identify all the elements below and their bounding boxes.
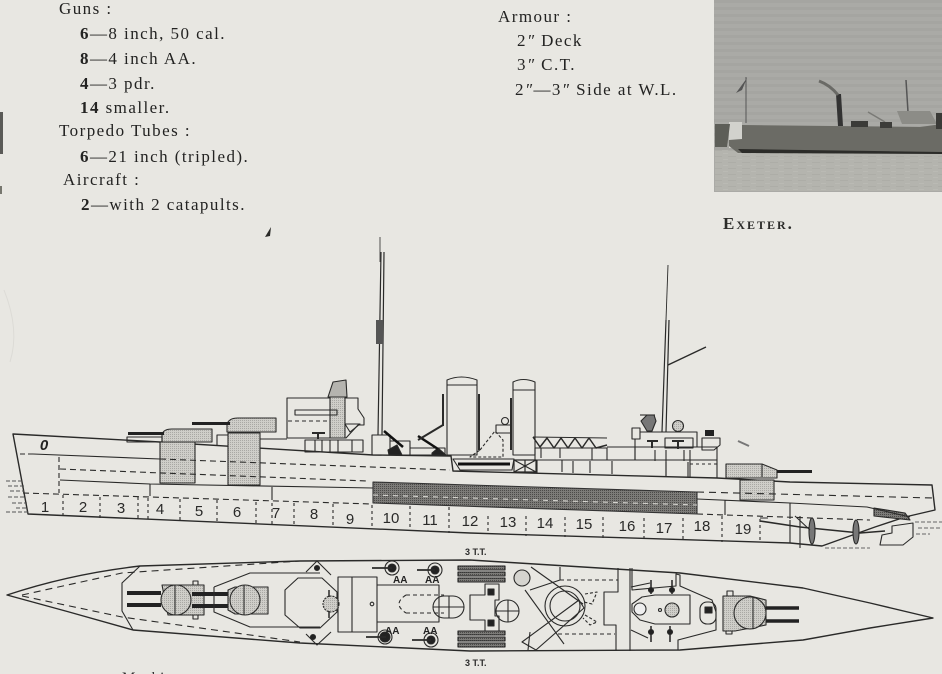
- torpedo tube labels: 3 T.T.: [465, 658, 487, 668]
- forward turrets plan: [127, 573, 320, 627]
- boats and crane: [453, 418, 536, 472]
- hull deck lines: [20, 454, 933, 520]
- AA guns and labels: AA: [385, 626, 399, 637]
- compartment numbers: 7: [272, 505, 280, 522]
- aft superstructure: [533, 415, 720, 478]
- plan hull outline: [7, 560, 933, 651]
- catapults plan: [514, 567, 618, 650]
- compartment numbers: 9: [346, 511, 354, 528]
- water at bow: [6, 481, 28, 512]
- text block: guns and armament: Aircraft :: [63, 170, 140, 189]
- text block: guns and armament: 2—with 2 catapults.: [81, 195, 246, 214]
- AA guns and labels: AA: [425, 575, 439, 586]
- bow marker 0: 0: [40, 437, 49, 454]
- compartment numbers: 11: [422, 512, 438, 529]
- text block: armour: 2″ Deck: [517, 31, 583, 50]
- compartment numbers: 3: [117, 500, 125, 517]
- mainmast and gaff: [662, 265, 706, 432]
- compartment numbers: 17: [656, 520, 672, 537]
- forward turrets: [127, 418, 287, 446]
- compartment numbers: 8: [310, 506, 318, 523]
- text block: guns and armament: 6—21 inch (tripled).: [80, 147, 249, 166]
- compartment numbers: 2: [79, 499, 87, 516]
- aft turret plan: [723, 591, 799, 634]
- photo: Exeter at sea: [714, 0, 942, 192]
- compartment numbers: 16: [619, 518, 635, 535]
- text block: guns and armament: 4—3 pdr.: [80, 74, 156, 93]
- side elevation of ship: [6, 237, 942, 548]
- compartment bulkheads: [63, 495, 760, 543]
- text block: guns and armament: Torpedo Tubes :: [59, 121, 191, 140]
- compartment numbers: 19: [735, 521, 751, 538]
- deck plan of ship: [7, 560, 933, 651]
- torpedo tube labels: [465, 547, 487, 668]
- ink speck: [738, 441, 749, 446]
- text block: armour: 3″ C.T.: [517, 55, 576, 74]
- compartment numbers: 12: [462, 513, 478, 530]
- compartment numbers: 15: [576, 516, 592, 533]
- compartment numbers: 4: [156, 501, 164, 518]
- text block: guns and armament: 14 smaller.: [80, 98, 171, 117]
- foremast: [376, 237, 384, 435]
- hull outline: [13, 434, 935, 546]
- armour belt: [373, 482, 697, 514]
- propellers and shafts: [760, 516, 913, 548]
- midships casing and funnels plan: [377, 584, 519, 631]
- forward breakwater: [122, 566, 140, 630]
- compartment numbers: 18: [694, 518, 710, 535]
- caption: Exeter: Exeter.: [723, 214, 794, 233]
- water at stern: [825, 522, 942, 548]
- ink spot: [265, 227, 271, 237]
- plan dashed deck edges: [22, 561, 300, 642]
- compartment numbers: [41, 499, 751, 538]
- compartment numbers: 10: [383, 510, 399, 527]
- AA guns and labels: AA: [423, 626, 437, 637]
- text block: armour: [498, 7, 678, 99]
- bridge plan: [285, 561, 377, 645]
- bridge and control tower: [287, 380, 364, 452]
- AA guns and labels: [366, 561, 442, 647]
- text block: guns and armament: 6—8 inch, 50 cal.: [80, 24, 226, 43]
- compartment numbers: 1: [41, 499, 49, 516]
- compartment numbers: 5: [195, 503, 203, 520]
- text block: armour: Armour :: [498, 7, 572, 26]
- torpedo tubes plan: [458, 566, 505, 647]
- left edge scan marks: [0, 112, 14, 362]
- compartment numbers: 14: [537, 515, 553, 532]
- AA guns and labels: AA: [393, 575, 407, 586]
- compartment numbers: 6: [233, 504, 241, 521]
- text block: guns and armament: 8—4 inch AA.: [80, 49, 197, 68]
- text block: guns and armament: [59, 0, 249, 214]
- after deck plan: [604, 568, 716, 651]
- aft turret: [726, 464, 812, 478]
- torpedo tube labels: 3 T.T.: [465, 547, 487, 557]
- text block: armour: 2″—3″ Side at W.L.: [515, 80, 678, 99]
- funnels: [443, 377, 535, 455]
- midships superstructure and guns: [372, 425, 446, 455]
- compartment numbers: 13: [500, 514, 516, 531]
- barbettes: [160, 433, 910, 520]
